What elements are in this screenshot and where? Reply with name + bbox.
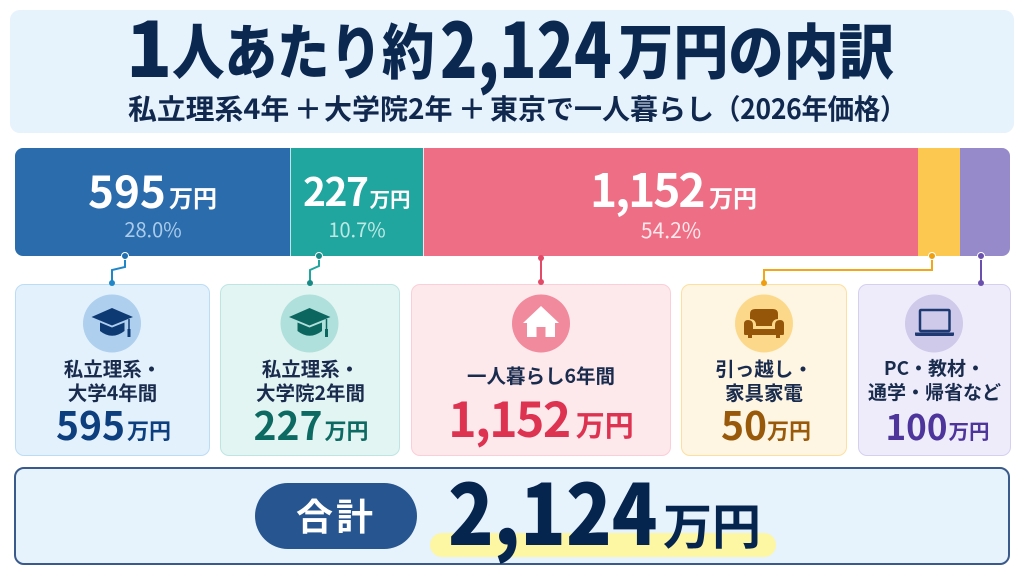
card: graduate [220,284,400,456]
label: moving: 引っ越し・ [715,353,813,382]
bar percent: 10.7%: 10.7% [328,214,386,243]
connector 2 [307,252,322,286]
subtitle: 私立理系4年 [128,88,289,128]
total amount [448,449,761,570]
label: graduate: 大学院2年間 [256,377,365,406]
bar label: 227 [303,162,410,218]
amount: 227: 227万円 [253,396,369,452]
card: undergraduate [15,284,210,456]
bar label: 227: 万円 [370,183,410,213]
card: others [858,284,1011,456]
subtitle [128,88,906,128]
connector 3 [538,255,544,285]
icon: sofa [735,294,793,352]
total amount: 2,124 [448,449,658,570]
bar label: 595: 万円 [169,179,217,214]
label: undergraduate [64,353,161,406]
label: living: 一人暮らし6年間 [467,360,615,389]
amount: 100: 100万円 [886,400,989,451]
subtitle: ＋ [294,88,322,128]
subtitle: （2026年価格） [714,88,906,128]
title panel [10,10,1014,133]
label: moving: 家具家電 [725,377,803,406]
bar label: 1,152: 万円 [709,179,757,214]
icon: graduation cap green [280,294,338,352]
connector 1 [109,252,128,286]
total highlight [430,533,776,557]
bar label: 1,152: 1,152 [590,155,704,221]
bar label: 227: 227 [303,162,368,218]
label: graduate: 私立理系・ [262,353,359,382]
icon: laptop [905,294,963,352]
amount: 1,152: 1,152万円 [448,381,634,451]
label: others [868,354,1001,405]
bar percent: 54.2%: 54.2% [641,215,701,245]
subtitle: 東京で一人暮らし [490,88,714,128]
connector 5 [978,252,984,286]
bar percent: 28.0%: 28.0% [124,214,182,243]
card: moving [681,284,847,456]
total panel [14,467,1010,565]
label: others: PC・教材・ [884,354,985,381]
title: 人あたり約 [172,5,434,92]
subtitle: ＋ [458,88,486,128]
connector 4 [761,252,936,286]
label: undergraduate: 私立理系・ [64,353,161,382]
card: living [411,284,671,456]
badge text: 合計 [296,487,376,541]
bar label: 595: 595 [88,157,166,221]
icon: house [512,294,570,352]
title [126,0,894,100]
icon: graduation cap blue [83,294,141,352]
total badge [255,483,417,549]
amount: 50: 50万円 [721,396,811,452]
title: 万円の内訳 [618,5,894,92]
bar label: 1,152 [590,155,757,221]
label: moving [715,353,813,406]
subtitle: 大学院2年 [324,88,453,128]
label: undergraduate: 大学4年間 [68,377,157,406]
label: graduate [256,353,365,406]
label: others: 通学・帰省など [868,378,1001,405]
amount: 595: 595万円 [56,396,171,452]
bar label: 595 [88,157,217,221]
total amount: 万円 [663,488,761,559]
stacked bar [15,148,1010,256]
